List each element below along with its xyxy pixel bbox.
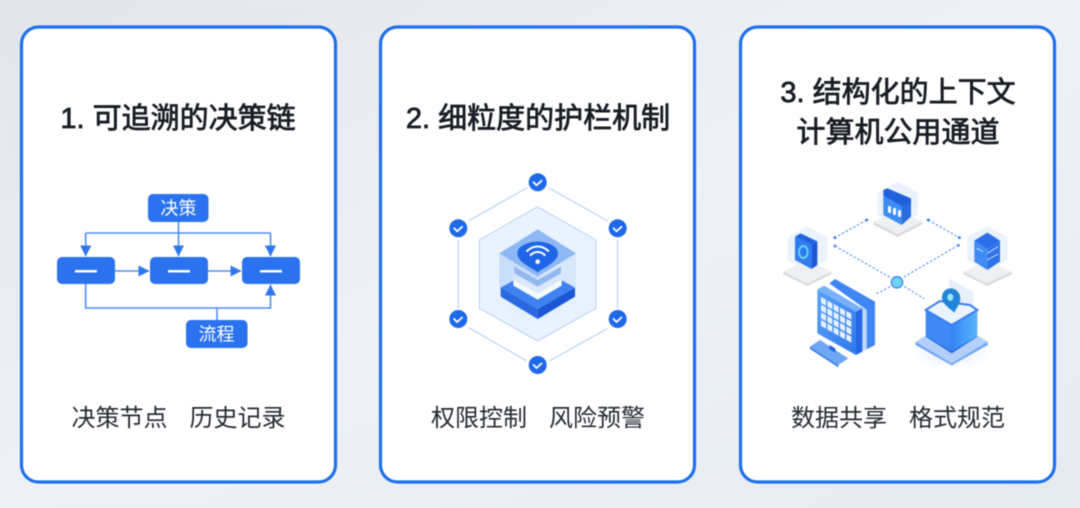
heading: context channel: 计算机公用通道 bbox=[796, 116, 1000, 149]
icon: right module bbox=[963, 226, 1012, 286]
flow chart: decision chain bbox=[57, 194, 300, 348]
labels: guardrails: 权限控制 风险预警 bbox=[431, 405, 645, 432]
icon: secure box bbox=[910, 278, 993, 371]
panel: decision chain bbox=[22, 27, 336, 482]
icon: left module bbox=[783, 227, 831, 286]
box: process label: 流程 bbox=[198, 324, 234, 344]
icon: monitor bbox=[810, 279, 875, 367]
labels: decision chain: 决策节点 历史记录 bbox=[72, 405, 286, 432]
panel: context channel bbox=[740, 27, 1054, 482]
diagram: shared computing channel bbox=[783, 182, 1012, 371]
heading: guardrails: 2. 细粒度的护栏机制 bbox=[406, 102, 670, 135]
box: step 2 bbox=[150, 257, 208, 284]
icon: check nodes bbox=[449, 173, 627, 374]
heading: context channel: 3. 结构化的上下文 bbox=[780, 76, 1016, 109]
labels: context channel: 数据共享 格式规范 bbox=[791, 405, 1005, 432]
heading: decision chain: 1. 可追溯的决策链 bbox=[60, 102, 296, 135]
icon: top module bbox=[873, 182, 922, 237]
layer stack bbox=[513, 267, 562, 300]
box: step 3 bbox=[242, 257, 300, 284]
wifi badge bbox=[517, 242, 558, 272]
base plate bbox=[501, 278, 575, 319]
icon: security hexagon bbox=[458, 188, 618, 361]
heading: context channel bbox=[780, 76, 1016, 149]
box: decision label bbox=[148, 194, 208, 222]
hub node bbox=[891, 277, 903, 288]
box: process label bbox=[186, 320, 248, 348]
box: decision label: 决策 bbox=[160, 198, 196, 218]
panel: guardrails bbox=[380, 27, 694, 482]
box: step 1 bbox=[57, 257, 115, 284]
